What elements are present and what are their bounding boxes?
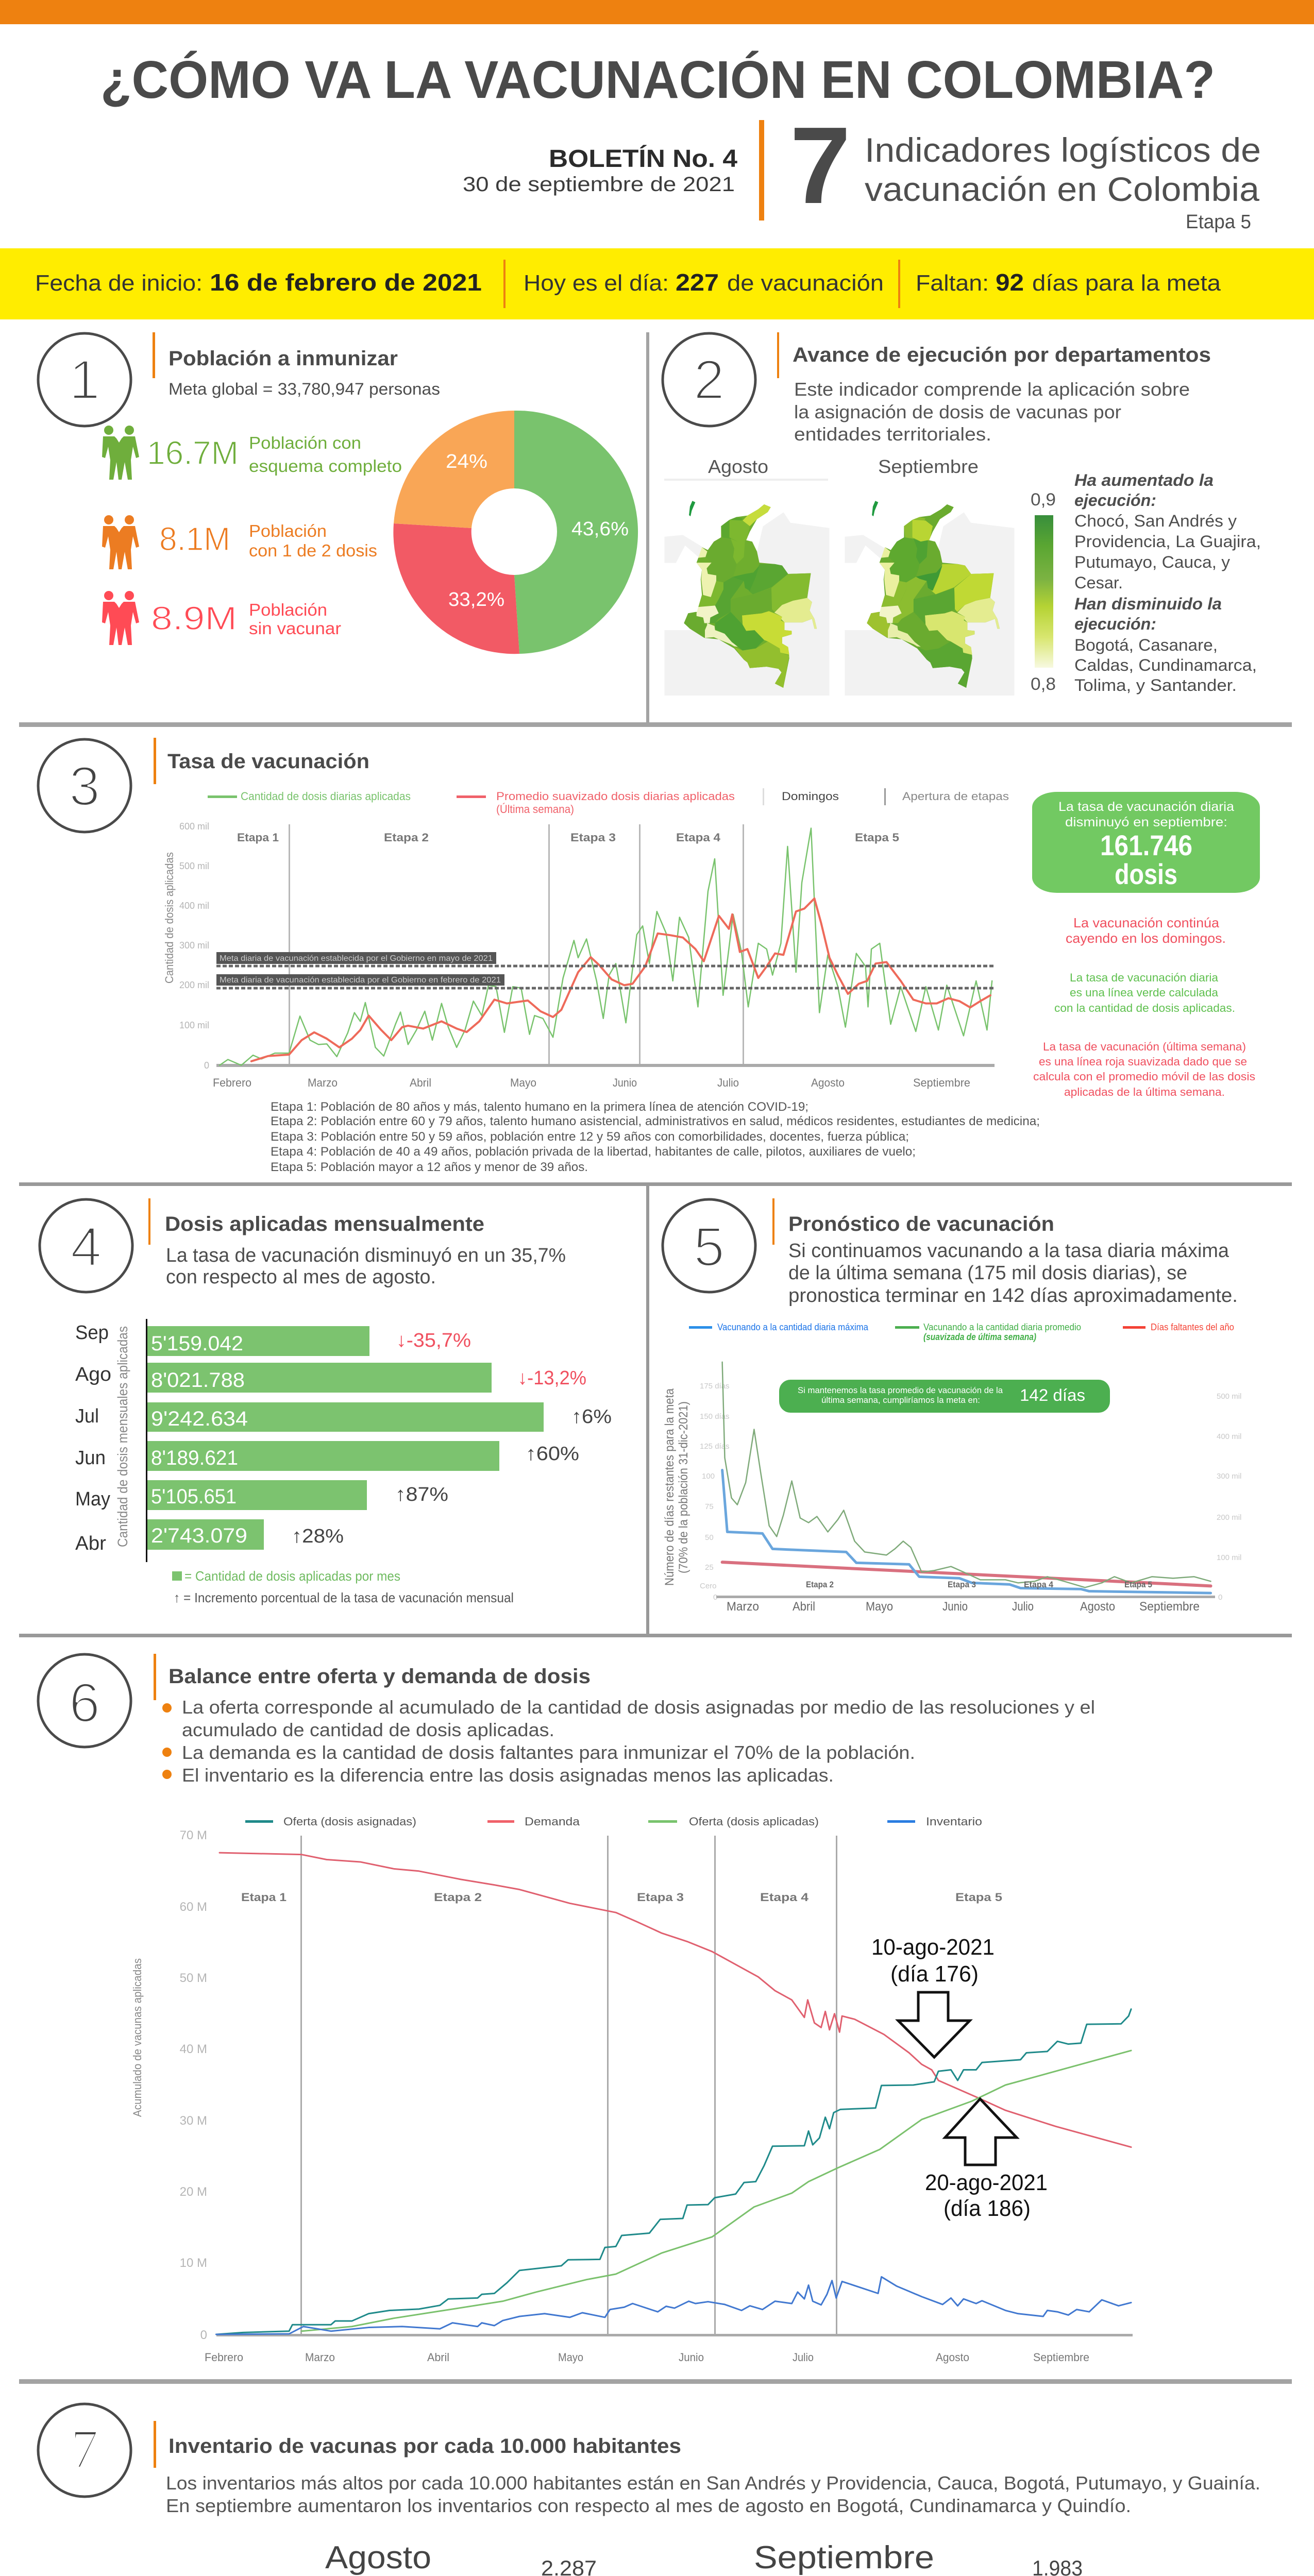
heading 1: Población a inmunizar	[169, 347, 398, 370]
label partial: Población	[249, 521, 327, 540]
map: septiembre avance	[845, 456, 1014, 696]
forecast line chart: 75	[705, 1502, 714, 1511]
balance line chart: 10 M	[180, 2256, 207, 2270]
forecast line chart: 125 días	[700, 1442, 730, 1451]
label partial: con 1 de 2 dosis	[249, 541, 377, 560]
title: ¿CÓMO VA LA VACUNACIÓN EN COLOMBIA?	[100, 50, 1215, 109]
callout green daily rate: dosis	[1115, 858, 1177, 890]
description 7: En septiembre aumentaron los inventarios con respecto al mes de agosto en Bogotá, Cundinamarca y Quindío.	[166, 2495, 1131, 2516]
chart legend: Cantidad de dosis diarias aplicadas	[241, 790, 411, 803]
label complete: Población con	[249, 433, 361, 452]
arrow up	[945, 2099, 1017, 2165]
stages description: Etapa 1: Población de 80 años y más, talento humano en la primera línea de atención COVID-19;	[271, 1100, 808, 1114]
label unvaccinated	[249, 600, 341, 638]
number badge 5: 5	[694, 1215, 725, 1278]
line chart daily doses: 200 mil	[179, 980, 209, 990]
balance line chart: Etapa 4	[760, 1891, 809, 1904]
line chart daily doses: Junio	[613, 1076, 637, 1089]
balance line chart: Marzo	[305, 2351, 335, 2364]
forecast line chart: 100	[702, 1472, 715, 1481]
description 5: Si continuamos vacunando a la tasa diaria máxima	[788, 1240, 1229, 1262]
forecast line chart: Cero	[700, 1582, 717, 1590]
forecast legend	[689, 1322, 1234, 1342]
bar chart monthly doses: Jul	[75, 1405, 99, 1427]
heading 6: Balance entre oferta y demanda de dosis	[169, 1665, 591, 1688]
forecast line chart: 0	[1218, 1593, 1222, 1602]
line chart daily doses: Etapa 3	[570, 831, 616, 844]
heading 3: Tasa de vacunación	[167, 750, 369, 773]
indicators heading: Indicadores logísticos de	[865, 131, 1261, 169]
bar chart monthly doses: Ago	[75, 1364, 111, 1385]
number badge 6	[38, 1654, 131, 1747]
description 2: entidades territoriales.	[794, 423, 991, 445]
balance line chart: 70 M	[180, 1828, 207, 1842]
bullet list 6: El inventario es la diferencia entre las dosis asignadas menos las aplicadas.	[182, 1765, 834, 1786]
balance line chart: Acumulado de vacunas aplicadas	[131, 1958, 144, 2117]
forecast line chart: 50	[705, 1533, 714, 1542]
bar chart monthly doses: ↑60%	[526, 1443, 579, 1465]
number badge 1	[38, 333, 131, 426]
callout green daily rate: La tasa de vacunación diaria	[1058, 800, 1234, 814]
forecast line chart: Marzo	[727, 1600, 759, 1614]
forecast line chart: 175 días	[700, 1382, 730, 1391]
department change list: Han disminuido la	[1074, 595, 1222, 613]
big number seven: 7	[790, 104, 851, 226]
header orange divider	[759, 120, 764, 221]
callout 20 agosto: (día 186)	[944, 2196, 1031, 2221]
balance line chart: Junio	[679, 2351, 704, 2364]
line chart daily doses: Meta diaria de vacunación establecida por el Gobierno en mayo de 2021	[220, 954, 493, 963]
bar chart monthly doses: ↑28%	[292, 1526, 344, 1547]
forecast line chart: Etapa 5	[1124, 1580, 1152, 1589]
note red line: es una línea roja suavizada dado que se	[1039, 1055, 1247, 1068]
bar chart legend: ↑ = Incremento porcentual de la tasa de vacunación mensual	[174, 1590, 514, 1605]
heading 4: Dosis aplicadas mensualmente	[165, 1213, 484, 1235]
department change list: Bogotá, Casanare,	[1074, 636, 1218, 654]
map: septiembre avance: Septiembre	[878, 456, 979, 477]
callout 142 dias: 142 días	[1020, 1386, 1085, 1404]
map: agosto avance	[664, 456, 830, 696]
balance line chart: 30 M	[180, 2114, 207, 2128]
number badge 1: 1	[69, 348, 100, 411]
icon: green people	[102, 426, 139, 480]
callout 142 dias: última semana, cumpliríamos la meta en:	[821, 1395, 980, 1405]
note red line: aplicadas de la última semana.	[1064, 1086, 1225, 1098]
vertical divider row three	[646, 1186, 649, 1634]
callout 20 agosto: 20-ago-2021	[925, 2170, 1048, 2195]
line chart daily doses	[163, 821, 995, 1089]
note red line: calcula con el promedio móvil de las dosis	[1033, 1070, 1255, 1083]
forecast line chart: (70% de la población 31-dic-2021)	[677, 1401, 690, 1573]
balance legend: Demanda	[525, 1815, 580, 1828]
label unvaccinated: sin vacunar	[249, 619, 341, 638]
bar chart monthly doses: May	[75, 1488, 110, 1510]
color scale	[1031, 490, 1056, 694]
description 5: de la última semana (175 mil dosis diarias), se	[788, 1262, 1187, 1284]
forecast line chart: 300 mil	[1217, 1472, 1241, 1481]
department change list: Providencia, La Guajira,	[1074, 532, 1261, 551]
indicators heading	[865, 131, 1261, 233]
callout 10 agosto	[871, 1935, 995, 1987]
label complete: esquema completo	[249, 456, 402, 476]
balance line chart: Etapa 1	[241, 1891, 287, 1904]
line chart daily doses: Agosto	[811, 1076, 845, 1089]
forecast line chart: Etapa 3	[948, 1580, 976, 1589]
bar chart monthly doses: ↓-35,7%	[396, 1330, 471, 1351]
bar chart monthly doses: ↑6%	[571, 1406, 612, 1428]
map: agosto avance: Agosto	[708, 456, 768, 477]
balance line chart: Septiembre	[1033, 2351, 1089, 2364]
bullet list 6	[162, 1697, 1095, 1786]
heading 2: Avance de ejecución por departamentos	[793, 344, 1211, 366]
forecast line chart: Número de días restantes para la meta	[663, 1388, 677, 1586]
department change list: ejecución:	[1074, 615, 1156, 633]
bar chart monthly doses: Cantidad de dosis mensuales aplicadas	[115, 1326, 130, 1547]
stages description: Etapa 5: Población mayor a 12 años y menor de 39 años.	[271, 1160, 588, 1174]
callout 10 agosto: 10-ago-2021	[871, 1935, 995, 1960]
line chart daily doses: Etapa 2	[384, 831, 429, 844]
bar chart monthly doses: ↑87%	[395, 1484, 448, 1505]
callout 20 agosto	[925, 2170, 1048, 2221]
balance legend: Inventario	[926, 1815, 982, 1828]
department change list: ejecución:	[1074, 491, 1156, 510]
balance line chart	[131, 1828, 1133, 2364]
balance line chart: 50 M	[180, 1971, 207, 1985]
bar chart monthly doses: 2'743.079	[151, 1524, 247, 1547]
forecast line chart: Abril	[793, 1600, 815, 1614]
forecast line chart: Agosto	[1080, 1600, 1115, 1614]
callout green daily rate: disminuyó en septiembre:	[1065, 815, 1227, 829]
vertical divider row one	[646, 332, 649, 722]
separator band	[19, 722, 1292, 727]
department change list	[1074, 471, 1261, 694]
indicators heading: vacunación en Colombia	[865, 170, 1259, 208]
balance line chart: Etapa 5	[955, 1891, 1002, 1904]
top orange bar	[0, 0, 1314, 24]
line chart daily doses: 300 mil	[179, 940, 209, 951]
line chart daily doses: 600 mil	[179, 821, 209, 832]
department change list: Chocó, San Andrés y	[1074, 512, 1237, 530]
color scale: 0,9	[1031, 490, 1056, 510]
bar chart monthly doses: 5'105.651	[151, 1485, 237, 1508]
chart legend: Domingos	[782, 790, 839, 803]
number badge 7: 7	[71, 2419, 98, 2480]
yellow status band: 92	[996, 269, 1024, 296]
line chart daily doses: 100 mil	[179, 1020, 209, 1030]
bar chart monthly doses: ↓-13,2%	[518, 1367, 586, 1389]
line chart daily doses: Etapa 4	[676, 831, 721, 844]
department change list: Putumayo, Cauca, y	[1074, 553, 1230, 571]
yellow status band: de vacunación	[727, 270, 884, 296]
stages description	[271, 1100, 1040, 1174]
line chart daily doses: Abril	[410, 1076, 431, 1089]
forecast line chart: Etapa 4	[1024, 1580, 1054, 1589]
bulletin info: 30 de septiembre de 2021	[463, 173, 735, 196]
balance line chart: Etapa 3	[637, 1891, 684, 1904]
balance line chart: Etapa 2	[434, 1891, 482, 1904]
department change list: Caldas, Cundinamarca,	[1074, 656, 1257, 674]
donut chart: 24%	[446, 451, 487, 472]
number badge 2: 2	[694, 348, 725, 411]
forecast line chart: 150 días	[700, 1412, 730, 1421]
bullet list 6: acumulado de cantidad de dosis aplicadas.	[182, 1719, 554, 1740]
balance legend: Oferta (dosis aplicadas)	[689, 1815, 819, 1828]
forecast legend: Vacunando a la cantidad diaria máxima	[717, 1322, 869, 1332]
forecast line chart: Junio	[942, 1600, 968, 1614]
separator band	[19, 1634, 1292, 1637]
forecast line chart: Etapa 2	[806, 1580, 834, 1589]
yellow status band: 227	[676, 269, 719, 296]
meta global: Meta global = 33,780,947 personas	[169, 380, 440, 398]
bulletin info: BOLETÍN No. 4	[549, 145, 737, 173]
description 7: Los inventarios más altos por cada 10.000 habitantes están en San Andrés y Providencia, Cauca, Bogotá, Putumayo, y Guainía.	[166, 2472, 1260, 2494]
label partial	[249, 521, 377, 560]
balance legend	[245, 1815, 982, 1828]
bullet list 6: La oferta corresponde al acumulado de la cantidad de dosis asignadas por medio de las resoluciones y el	[182, 1697, 1095, 1718]
description 2: Este indicador comprende la aplicación sobre	[794, 379, 1190, 400]
forecast line chart	[663, 1362, 1241, 1614]
stages description: Etapa 4: Población de 40 a 49 años, población privada de la libertad, habitantes de calle, pilotos, auxiliares de vuelo;	[271, 1145, 916, 1159]
map: septiembre inventario: Septiembre	[754, 2540, 934, 2575]
yellow status band	[0, 248, 1314, 319]
panel: balance oferta demanda	[38, 1654, 1133, 2364]
yellow status band: Faltan:	[916, 270, 989, 296]
forecast line chart: Septiembre	[1139, 1600, 1200, 1614]
separator band	[19, 2379, 1292, 2384]
balance line chart: Julio	[793, 2351, 814, 2364]
callout green daily rate: 161.746	[1100, 829, 1192, 861]
icon: orange people	[102, 515, 139, 569]
description 5: pronostica terminar en 142 días aproximadamente.	[788, 1285, 1238, 1307]
forecast line chart: 200 mil	[1217, 1513, 1241, 1522]
callout 10 agosto: (día 176)	[890, 1961, 979, 1987]
yellow status band: días para la meta	[1032, 270, 1221, 296]
department change list: Tolima, y Santander.	[1074, 676, 1237, 694]
stages description: Etapa 3: Población entre 50 y 59 años, población entre 12 y 59 años con comorbilidades, docentes, fuerza pública;	[271, 1130, 909, 1144]
note red line	[1033, 1040, 1255, 1098]
note green line: es una línea verde calculada	[1070, 986, 1219, 999]
note sundays	[1066, 915, 1226, 946]
number badge 3	[38, 739, 131, 832]
description 7	[166, 2472, 1260, 2516]
panel: tasa de vacunacion	[38, 738, 1260, 1174]
balance line chart: Mayo	[558, 2351, 583, 2364]
bar chart legend: = Cantidad de dosis aplicadas por mes	[184, 1568, 400, 1584]
bulletin info	[463, 145, 737, 196]
stat 8.9M: 8.9M	[151, 600, 237, 637]
bar chart monthly doses: 8'021.788	[151, 1369, 245, 1392]
chart legend: Apertura de etapas	[902, 790, 1009, 803]
panel: poblacion a inmunizar	[38, 332, 638, 654]
department change list: Ha aumentado la	[1074, 471, 1214, 489]
chart legend: Promedio suavizado dosis diarias aplicadas	[496, 790, 735, 803]
panel: inventario por 10000	[38, 2404, 1260, 2576]
yellow status band: Hoy es el día:	[524, 270, 669, 296]
bar chart monthly doses: 5'159.042	[151, 1332, 243, 1355]
stat 16.7M: 16.7M	[147, 434, 239, 471]
forecast legend: Días faltantes del año	[1151, 1322, 1234, 1332]
arrow down	[898, 1992, 970, 2057]
forecast line chart: 25	[705, 1563, 714, 1572]
forecast line chart: 400 mil	[1217, 1432, 1241, 1441]
bar chart monthly doses: Jun	[75, 1447, 106, 1469]
forecast legend: Vacunando a la cantidad diaria promedio	[923, 1322, 1081, 1332]
icon: red people	[102, 591, 139, 645]
label complete	[249, 433, 402, 476]
stat 8.1M: 8.1M	[159, 520, 230, 557]
separator band	[19, 1182, 1292, 1186]
line chart daily doses: Marzo	[308, 1076, 338, 1089]
donut chart: 43,6%	[571, 518, 629, 540]
heading 7: Inventario de vacunas por cada 10.000 habitantes	[169, 2435, 681, 2458]
line chart daily doses: Julio	[717, 1076, 739, 1089]
description 4: con respecto al mes de agosto.	[166, 1266, 436, 1288]
balance line chart: Abril	[427, 2351, 449, 2364]
line chart daily doses: 0	[204, 1060, 209, 1071]
heading 5: Pronóstico de vacunación	[788, 1213, 1054, 1235]
description 4: La tasa de vacunación disminuyó en un 35,7%	[166, 1245, 566, 1266]
department change list: Cesar.	[1074, 573, 1123, 592]
forecast line chart: Mayo	[866, 1600, 893, 1614]
chart legend: (Última semana)	[496, 803, 574, 816]
balance line chart: Agosto	[936, 2351, 969, 2364]
description 4	[166, 1245, 566, 1288]
donut chart	[393, 411, 638, 654]
balance line chart: 0	[200, 2328, 207, 2342]
description 5	[788, 1240, 1238, 1307]
panel: pronostico	[663, 1198, 1241, 1614]
description 2: la asignación de dosis de vacunas por	[794, 401, 1121, 422]
label unvaccinated: Población	[249, 600, 327, 619]
chart legend	[208, 788, 1009, 816]
note sundays: cayendo en los domingos.	[1066, 930, 1226, 946]
note red line: La tasa de vacunación (última semana)	[1043, 1040, 1246, 1053]
note green line: con la cantidad de dosis aplicadas.	[1054, 1002, 1235, 1014]
number badge 3: 3	[69, 755, 100, 817]
line chart daily doses: 400 mil	[179, 901, 209, 911]
line chart daily doses: Etapa 1	[237, 831, 279, 844]
number badge 6: 6	[69, 1671, 100, 1734]
number badge 5	[663, 1199, 755, 1292]
color scale: 0,8	[1031, 674, 1056, 694]
bar chart monthly doses: Abr	[75, 1533, 106, 1554]
panel: dosis mensuales	[40, 1198, 612, 1605]
forecast line chart: 500 mil	[1217, 1392, 1241, 1401]
yellow status band: 16 de febrero de 2021	[210, 269, 482, 296]
balance line chart: 40 M	[180, 2042, 207, 2056]
number badge 7	[38, 2404, 131, 2497]
bar chart legend	[172, 1568, 514, 1605]
bar chart monthly doses: Sep	[75, 1322, 109, 1344]
line chart daily doses: Etapa 5	[855, 831, 899, 844]
panel: avance por departamentos	[663, 332, 1261, 696]
balance line chart: 60 M	[180, 1900, 207, 1914]
line chart daily doses: Mayo	[510, 1076, 536, 1089]
forecast line chart: 0	[713, 1593, 717, 1602]
description 2	[794, 379, 1190, 445]
yellow status band: Fecha de inicio:	[35, 270, 203, 296]
bar chart monthly doses	[75, 1319, 612, 1562]
note sundays: La vacunación continúa	[1073, 915, 1220, 930]
balance line chart: Febrero	[205, 2351, 243, 2364]
bar chart monthly doses: 8'189.621	[151, 1447, 238, 1469]
map: agosto inventario: Agosto	[325, 2540, 431, 2575]
balance legend: Oferta (dosis asignadas)	[283, 1815, 416, 1828]
donut chart: 33,2%	[448, 589, 504, 611]
stages description: Etapa 2: Población entre 60 y 79 años, talento humano asistencial, administrativos en salud, médicos residentes, estudiantes de medicina;	[271, 1114, 1040, 1128]
forecast line chart: 100 mil	[1217, 1553, 1241, 1562]
callout 142 dias	[779, 1380, 1110, 1413]
callout green daily rate	[1032, 792, 1260, 893]
line chart daily doses: Cantidad de dosis aplicadas	[163, 852, 176, 984]
forecast legend: (suavizada de última semana)	[923, 1332, 1036, 1342]
number badge 4: 4	[71, 1215, 102, 1278]
line chart daily doses: Meta diaria de vacunación establecida por el Gobierno en febrero de 2021	[220, 976, 501, 985]
bullet list 6: La demanda es la cantidad de dosis faltantes para inmunizar el 70% de la población.	[182, 1742, 915, 1763]
number badge 2	[663, 333, 755, 426]
line chart daily doses: Septiembre	[913, 1076, 970, 1089]
balance line chart: 20 M	[180, 2185, 207, 2199]
note green line	[1054, 971, 1235, 1014]
callout 142 dias: Si mantenemos la tasa promedio de vacunación de la	[798, 1385, 1003, 1395]
forecast line chart: Julio	[1012, 1600, 1034, 1614]
indicators heading: Etapa 5	[1186, 211, 1251, 233]
number badge 4	[40, 1199, 132, 1292]
line chart daily doses: Febrero	[213, 1076, 251, 1089]
bar chart monthly doses: 9'242.634	[151, 1408, 248, 1430]
note green line: La tasa de vacunación diaria	[1070, 971, 1219, 984]
line chart daily doses: 500 mil	[179, 861, 209, 871]
